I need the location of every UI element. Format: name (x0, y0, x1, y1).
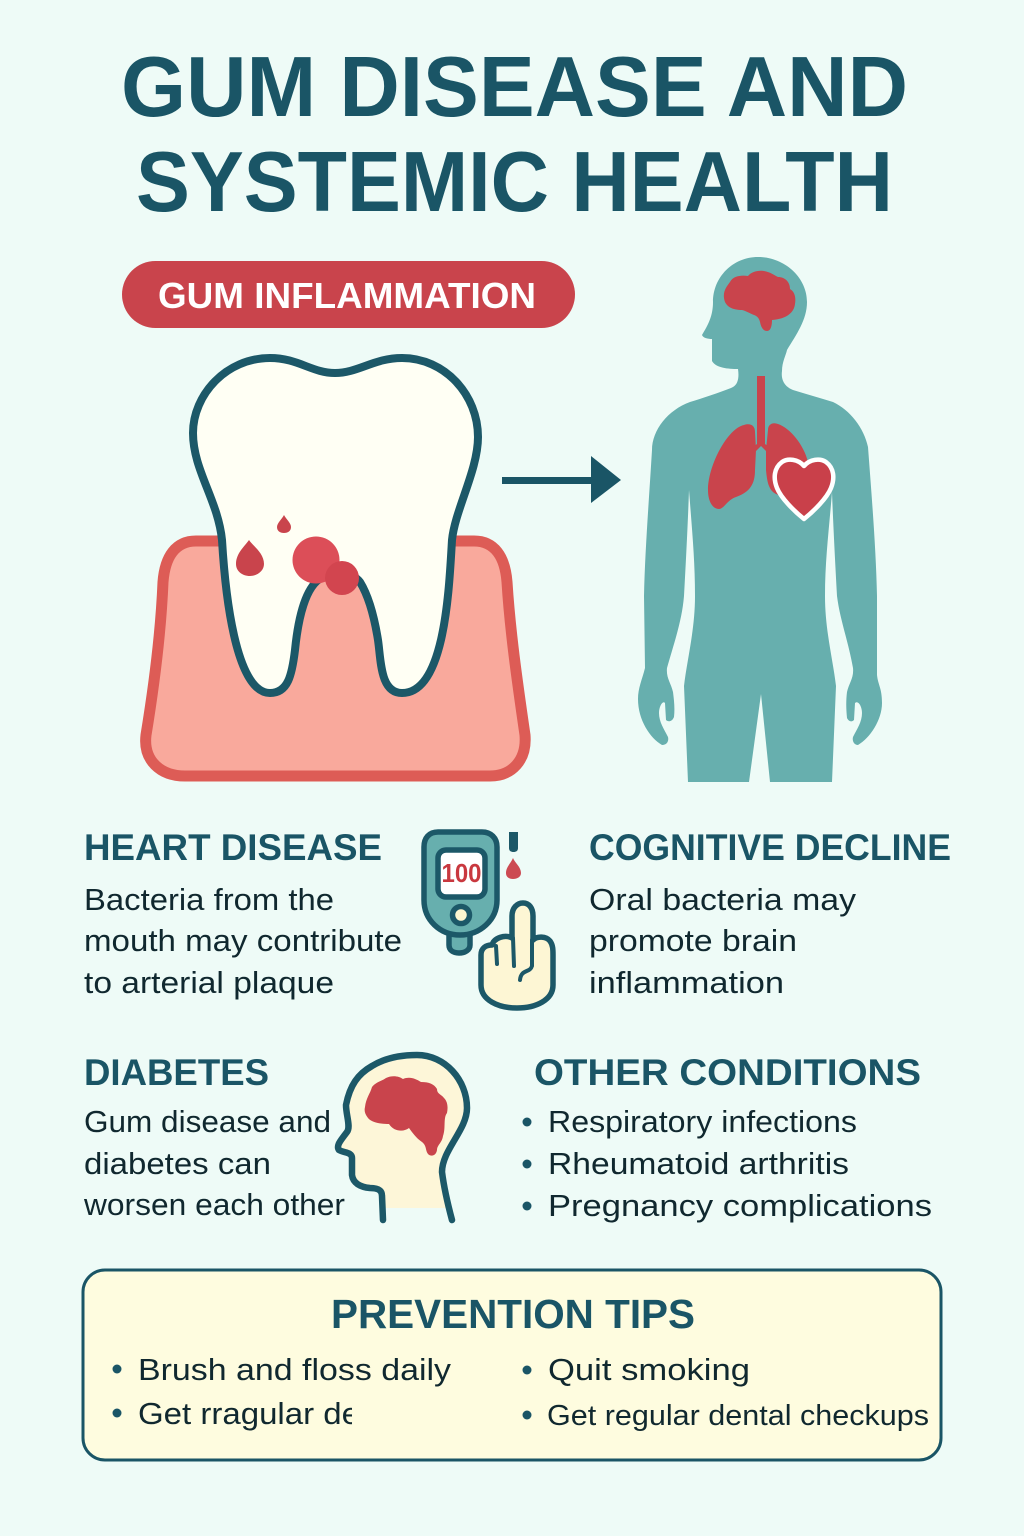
tips list: Get regular dental checkups (547, 1400, 929, 1432)
arrow: tooth to body (502, 456, 621, 503)
text block: diabetes: diabetes can (84, 1146, 271, 1181)
heading: prevention tips: PREVENTION TIPS (331, 1291, 695, 1337)
icon: glucose meter and finger (424, 832, 553, 1008)
organ: left lung (708, 424, 756, 509)
text block: heart disease: to arterial plaque (84, 965, 334, 1000)
tips list: Get rragular de (138, 1396, 360, 1431)
title (121, 40, 908, 230)
text block: heart disease: Bacteria from the (84, 882, 334, 917)
text block: heart disease: HEART DISEASE (84, 827, 382, 868)
text block: diabetes: DIABETES (84, 1052, 269, 1093)
organ: trachea (753, 376, 769, 451)
organ: right lung (766, 423, 808, 500)
icon: head with brain (337, 1055, 467, 1225)
text block: cognitive decline: COGNITIVE DECLINE (589, 827, 951, 868)
badge: gum inflammation (122, 261, 575, 328)
list: other conditions: Pregnancy complications (548, 1188, 932, 1223)
tips list: Quit smoking (548, 1352, 750, 1387)
tips list: Brush and floss daily (138, 1352, 452, 1387)
organ: brain (724, 271, 795, 331)
title: SYSTEMIC HEALTH (136, 135, 893, 230)
text block: cognitive decline: inflammation (589, 965, 784, 1000)
title: GUM DISEASE AND (121, 40, 908, 135)
list: other conditions: OTHER CONDITIONS (534, 1052, 921, 1093)
text block: heart disease (84, 827, 402, 1000)
illustration: inflamed tooth and gum (146, 358, 525, 776)
icon: glucose meter and finger: 100 (442, 858, 482, 888)
tips list (112, 1352, 929, 1432)
text block: diabetes: Gum disease and (84, 1104, 331, 1139)
list: other conditions: Respiratory infections (548, 1104, 857, 1139)
list: other conditions: Rheumatoid arthritis (548, 1146, 849, 1181)
text block: cognitive decline: promote brain (589, 923, 797, 958)
illustration: human body with organs (638, 257, 882, 782)
text block: cognitive decline (589, 827, 951, 1000)
badge: gum inflammation: GUM INFLAMMATION (158, 275, 536, 316)
text block: diabetes: worsen each other (83, 1187, 345, 1222)
panel: prevention tips (83, 1270, 941, 1460)
text block: heart disease: mouth may contribute (84, 923, 402, 958)
list: other conditions (522, 1052, 932, 1223)
icon: heart (775, 460, 833, 519)
text block: cognitive decline: Oral bacteria may (589, 882, 857, 917)
text block: diabetes (83, 1052, 345, 1222)
